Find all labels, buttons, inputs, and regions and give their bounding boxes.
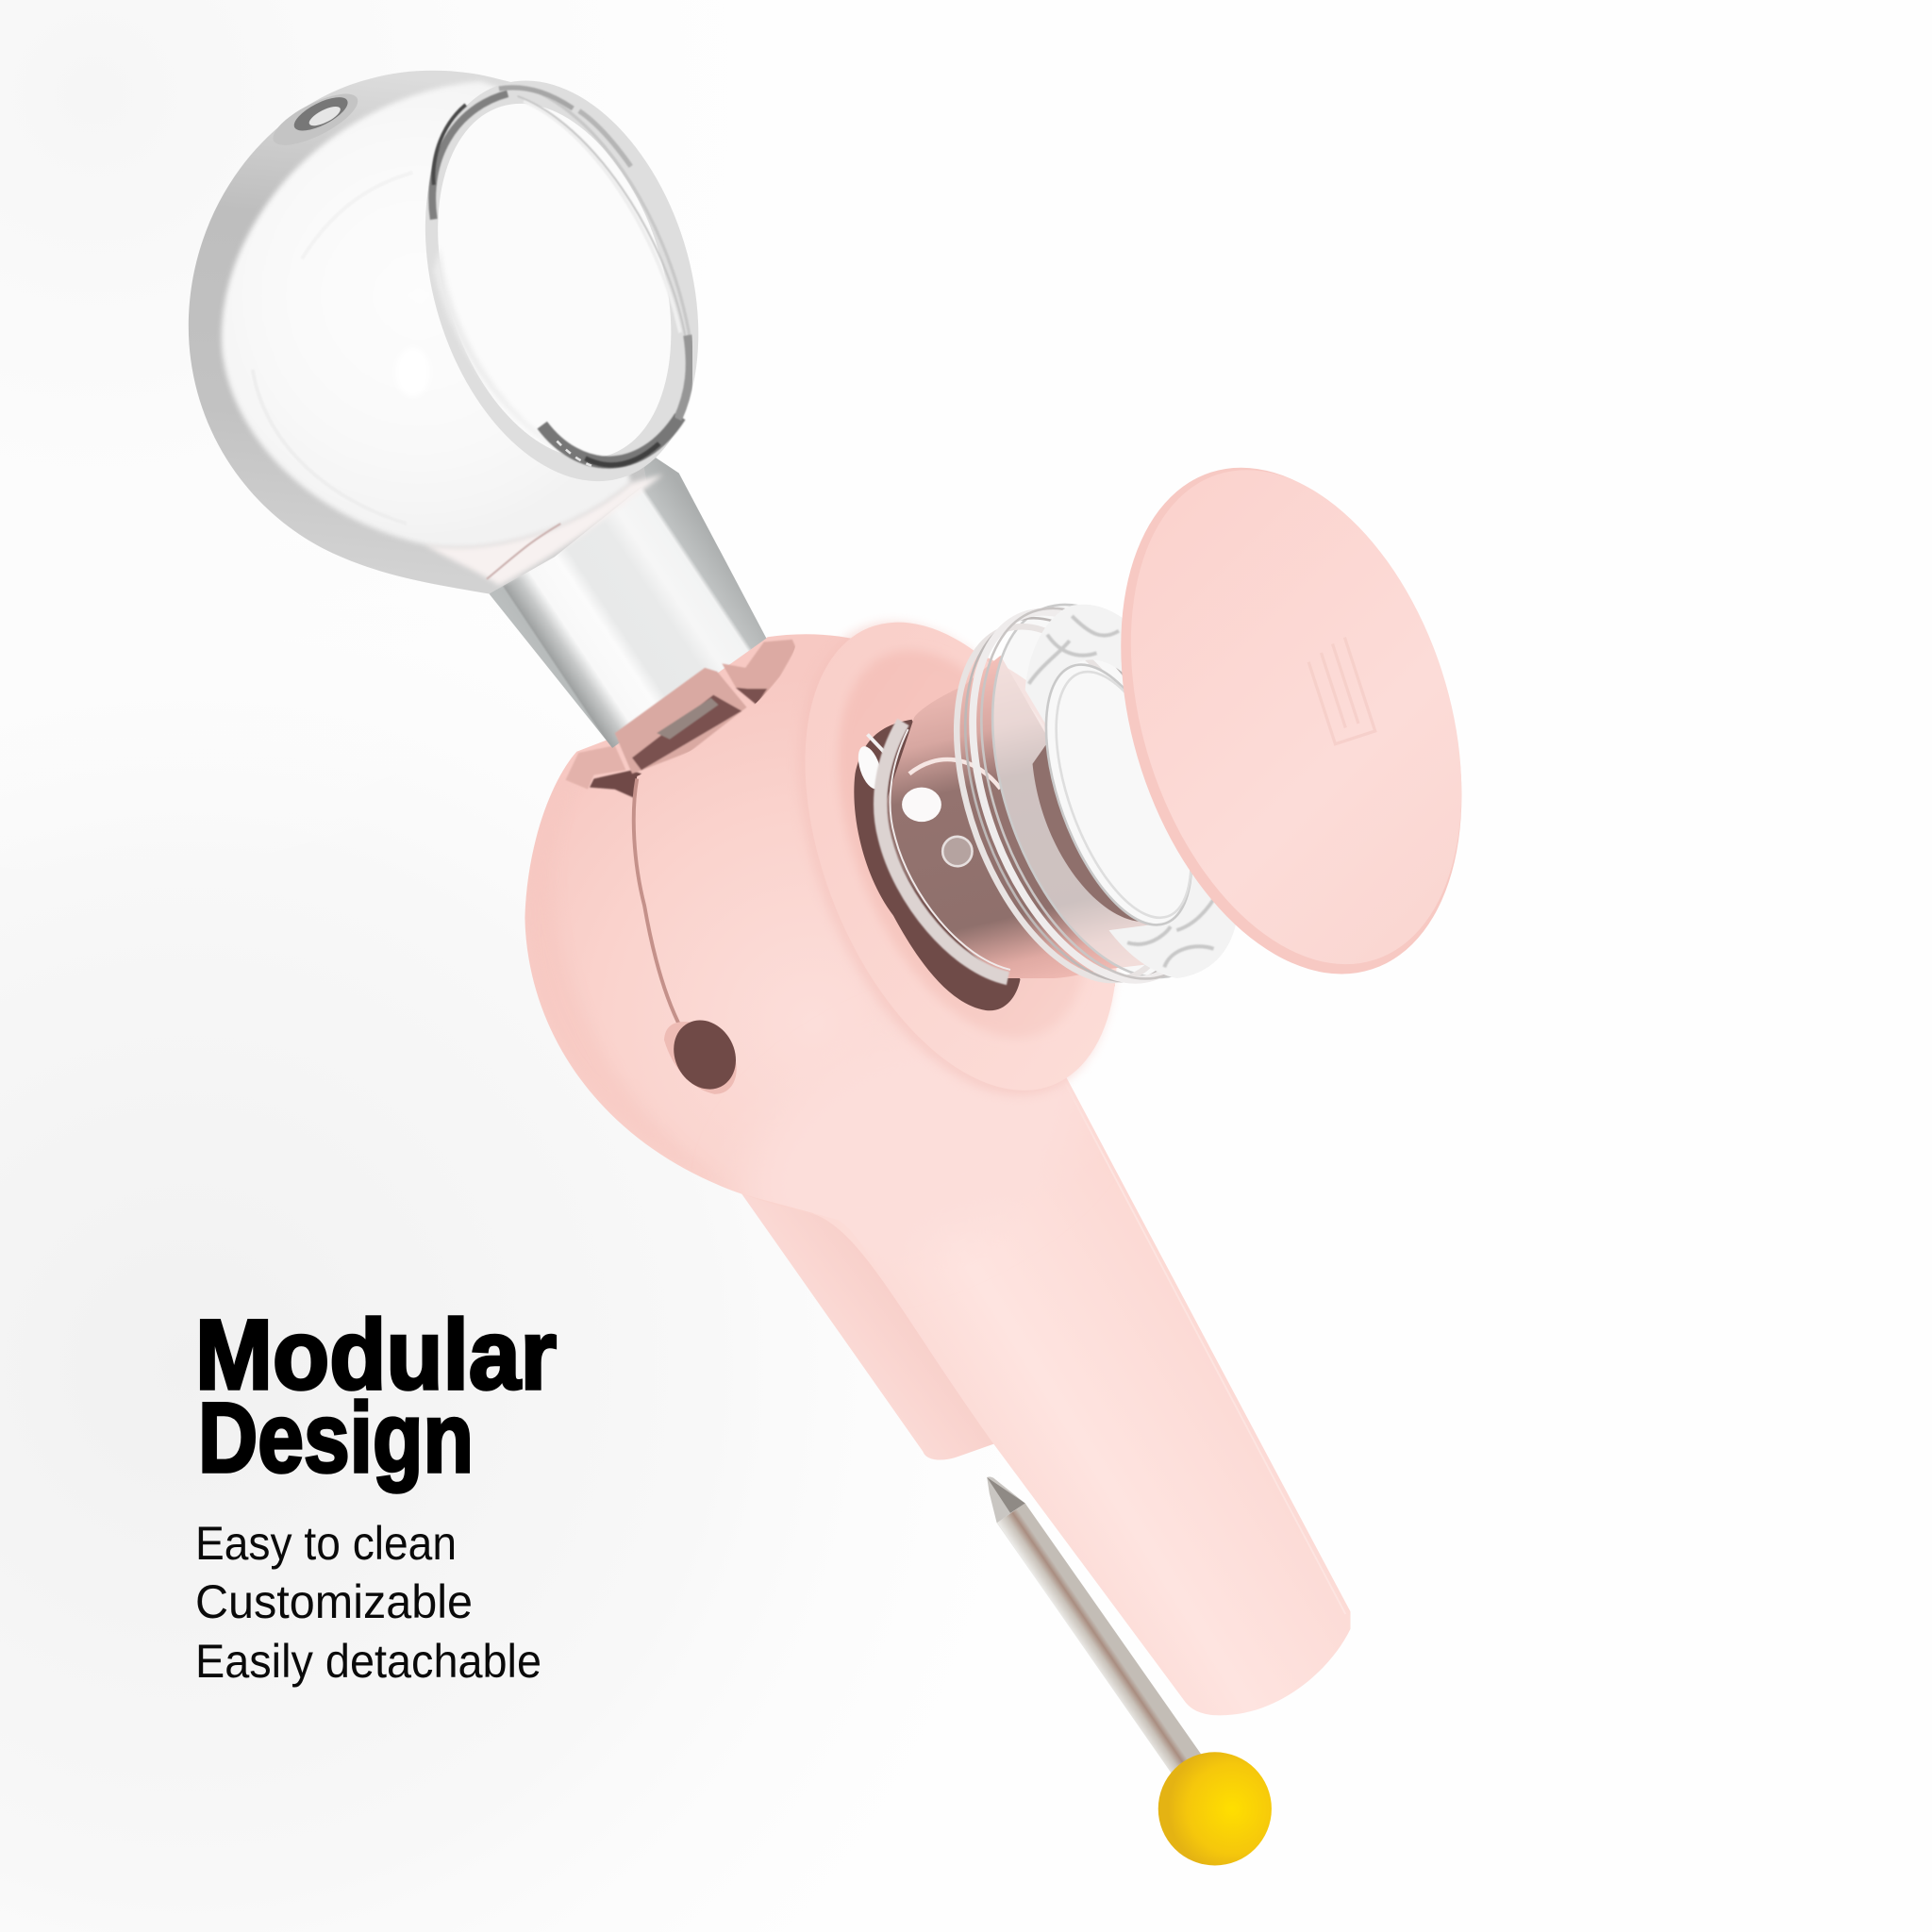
body slit and keyhole	[634, 778, 748, 1100]
soft ring shadow	[735, 576, 1177, 1141]
rim soft inner shading	[434, 246, 579, 458]
pick tip	[987, 1476, 1025, 1523]
yellow ball handle	[1158, 1752, 1272, 1865]
faint inner arcs	[253, 370, 407, 524]
rim swirl marks	[1029, 616, 1214, 967]
blend of body into handle	[758, 1068, 977, 1213]
dark below collar	[590, 770, 641, 798]
disc face	[1072, 427, 1521, 1007]
feature list	[195, 1517, 541, 1688]
bowl rim	[379, 46, 744, 515]
infographic canvas	[0, 42, 1462, 1866]
ring inner wall	[788, 614, 1140, 1074]
top opening with dark interior	[566, 745, 641, 798]
feature list: Easy to clean	[195, 1517, 457, 1570]
threads	[913, 597, 1221, 1010]
flange ring	[880, 722, 1008, 978]
bowl opening	[397, 75, 711, 487]
front lip of body	[632, 641, 862, 862]
glass bowl sphere	[189, 46, 744, 594]
jar reflections	[909, 759, 1001, 789]
heading: Modular Design: Modular	[195, 1300, 557, 1410]
jar thick rim	[946, 573, 1276, 1009]
product illustration: modular pipe	[189, 46, 1522, 1865]
dark cavity	[854, 720, 1020, 1010]
heading: Modular Design: Design	[198, 1383, 474, 1493]
feature list: Easily detachable	[195, 1635, 541, 1688]
main tapered handle	[813, 1070, 1351, 1715]
silicone cap disc	[1060, 424, 1522, 1018]
heading: Modular Design	[195, 1300, 557, 1493]
bowl inner highlight	[222, 81, 631, 547]
rim striations	[499, 88, 690, 339]
bowl outer shell	[189, 71, 647, 594]
cleaning pick	[987, 1476, 1272, 1865]
centre glint	[395, 347, 430, 397]
bowl flare highlight	[425, 475, 663, 585]
rim dark reflections	[432, 93, 508, 219]
interior brown refraction	[1033, 740, 1140, 922]
through hole in cavity	[854, 743, 886, 791]
glass jar insert	[880, 573, 1276, 1012]
collar reflection on stem base	[615, 640, 796, 774]
rim upper and lower clear glass	[1025, 605, 1183, 727]
embossed logo	[1305, 638, 1375, 744]
secondary lower handle	[741, 1158, 1059, 1460]
right lip recess	[722, 640, 796, 705]
pink silicone body sphere	[525, 634, 1115, 1226]
glass stem	[490, 456, 766, 748]
collar ring	[735, 576, 1179, 1141]
jar opening	[1016, 646, 1221, 943]
air hole	[266, 84, 364, 155]
feature list: Customizable	[195, 1575, 473, 1628]
jar neck	[882, 656, 1176, 978]
pick needle	[997, 1503, 1201, 1779]
left lip recess	[566, 745, 626, 790]
